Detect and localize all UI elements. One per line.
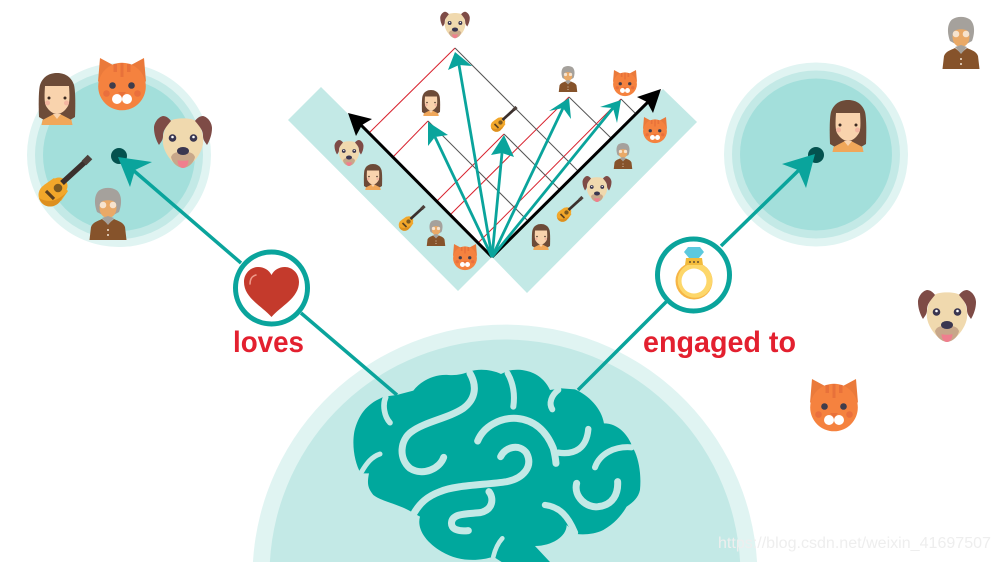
icons: answer entities above the cone: [422, 12, 637, 132]
panel: right teal band: [492, 89, 697, 293]
icon: heart in ring: [236, 252, 308, 324]
arrows: teal vectors from origin: [428, 52, 621, 257]
icon: dog: [918, 290, 976, 342]
panel: brain background circle: [253, 325, 757, 562]
icons: right band entities: [532, 117, 667, 250]
icon: ring in circle: [658, 239, 730, 311]
label: loves: loves: [233, 326, 304, 359]
arrow: left black axis: [348, 113, 492, 257]
icon: cat: [810, 379, 858, 431]
watermark: https://blog.csdn.net/weixin_41697507: [718, 535, 991, 552]
panel: left teal band: [288, 87, 492, 291]
arrow: engaged to vector: [578, 154, 815, 390]
label: engaged to: engaged to: [643, 326, 796, 359]
icons: left band entities: [334, 140, 477, 270]
arrow: right black axis: [492, 89, 661, 257]
icon: brain: [353, 370, 640, 562]
icons: left circle entities: [38, 58, 212, 240]
arrow: loves vector: [118, 157, 397, 395]
panel: right entity embedding circle: [724, 62, 908, 246]
icon: old person: [942, 17, 980, 69]
chart: relation lines in rotated coordinate system: [369, 48, 635, 243]
panel: left entity embedding circle: [27, 63, 211, 247]
icon: girl in right circle: [830, 100, 866, 152]
